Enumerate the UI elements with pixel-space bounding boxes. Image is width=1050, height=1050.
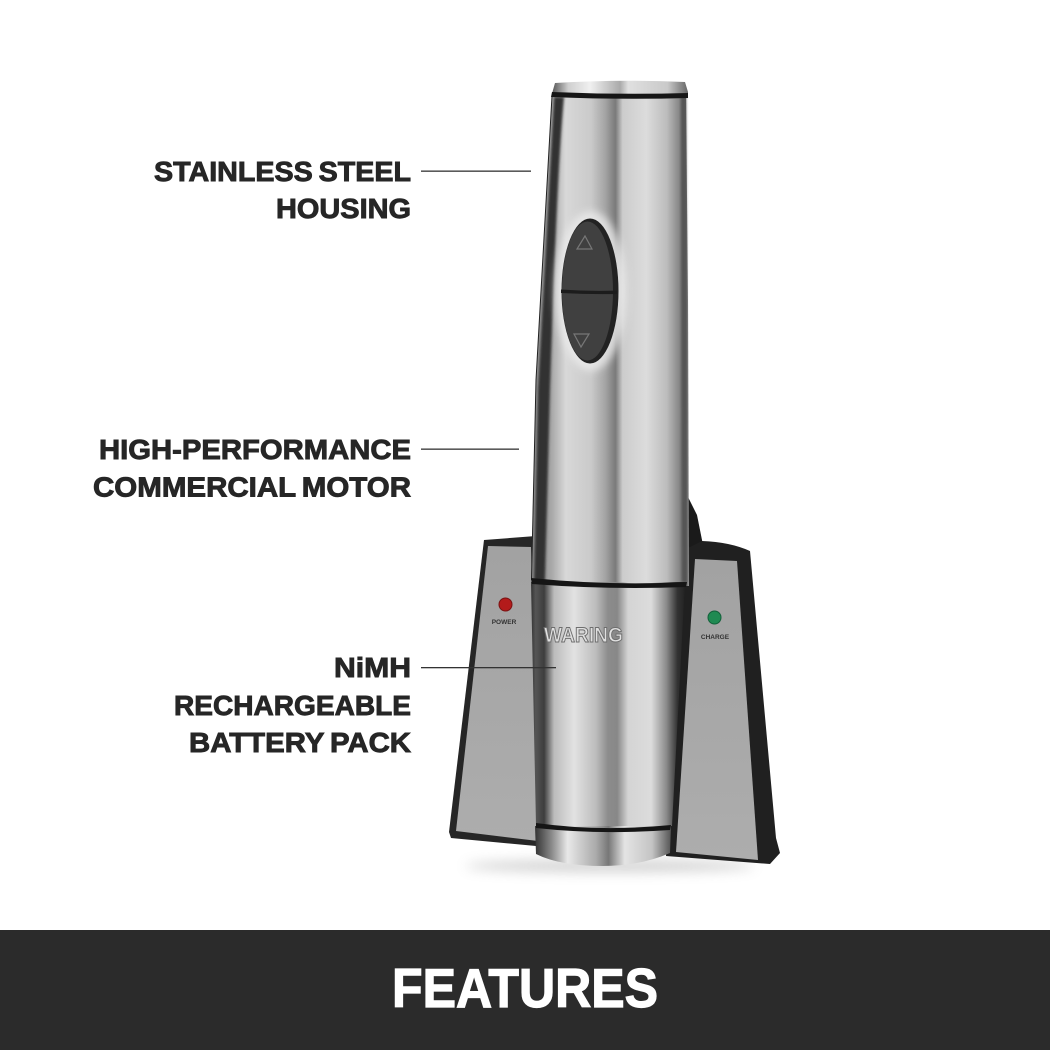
callout: commercial motor: [93, 434, 519, 502]
rocker button: [561, 218, 618, 364]
arrow up: [577, 236, 592, 249]
brand logo: WARING: [544, 624, 623, 647]
floor shadow: [465, 860, 755, 872]
charge LED: [708, 611, 721, 624]
collar ring: [531, 578, 687, 588]
callout: stainless steel housing: [154, 156, 531, 224]
button halo: [555, 211, 627, 371]
callout: battery pack: BATTERY PACK: [189, 727, 411, 758]
housing: dark right reflection: [681, 96, 687, 582]
callout: commercial motor: COMMERCIAL MOTOR: [93, 472, 411, 502]
callout: stainless steel housing: STAINLESS STEEL: [154, 156, 411, 187]
charging base: left wing: [449, 536, 540, 846]
housing: top rim gasket: [551, 92, 688, 99]
charging base: right wing: [666, 541, 780, 864]
housing: dark left reflection: [534, 97, 564, 582]
bottom cap: [535, 826, 671, 866]
power label: POWER: [492, 619, 517, 626]
charging base: rear wedge: [684, 497, 703, 552]
callout: battery pack: NiMH: [334, 652, 411, 683]
product: electric wine opener on charging base: [449, 81, 780, 866]
charge label: CHARGE: [701, 634, 730, 641]
arrow down: [574, 334, 589, 347]
battery section: lower body: [531, 582, 685, 826]
callout: commercial motor: HIGH-PERFORMANCE: [99, 434, 411, 465]
callout: battery pack: RECHARGEABLE: [174, 690, 411, 721]
bottom gasket: [536, 823, 671, 832]
housing: top rim: [552, 81, 688, 94]
housing: upper stainless body: [531, 92, 689, 586]
housing: left edge line: [532, 96, 552, 580]
footer title: FEATURES: [392, 957, 658, 1019]
callout: battery pack: [174, 652, 556, 758]
footer banner: [0, 930, 1050, 1050]
power LED: [499, 598, 512, 611]
callout: stainless steel housing: HOUSING: [276, 193, 411, 224]
